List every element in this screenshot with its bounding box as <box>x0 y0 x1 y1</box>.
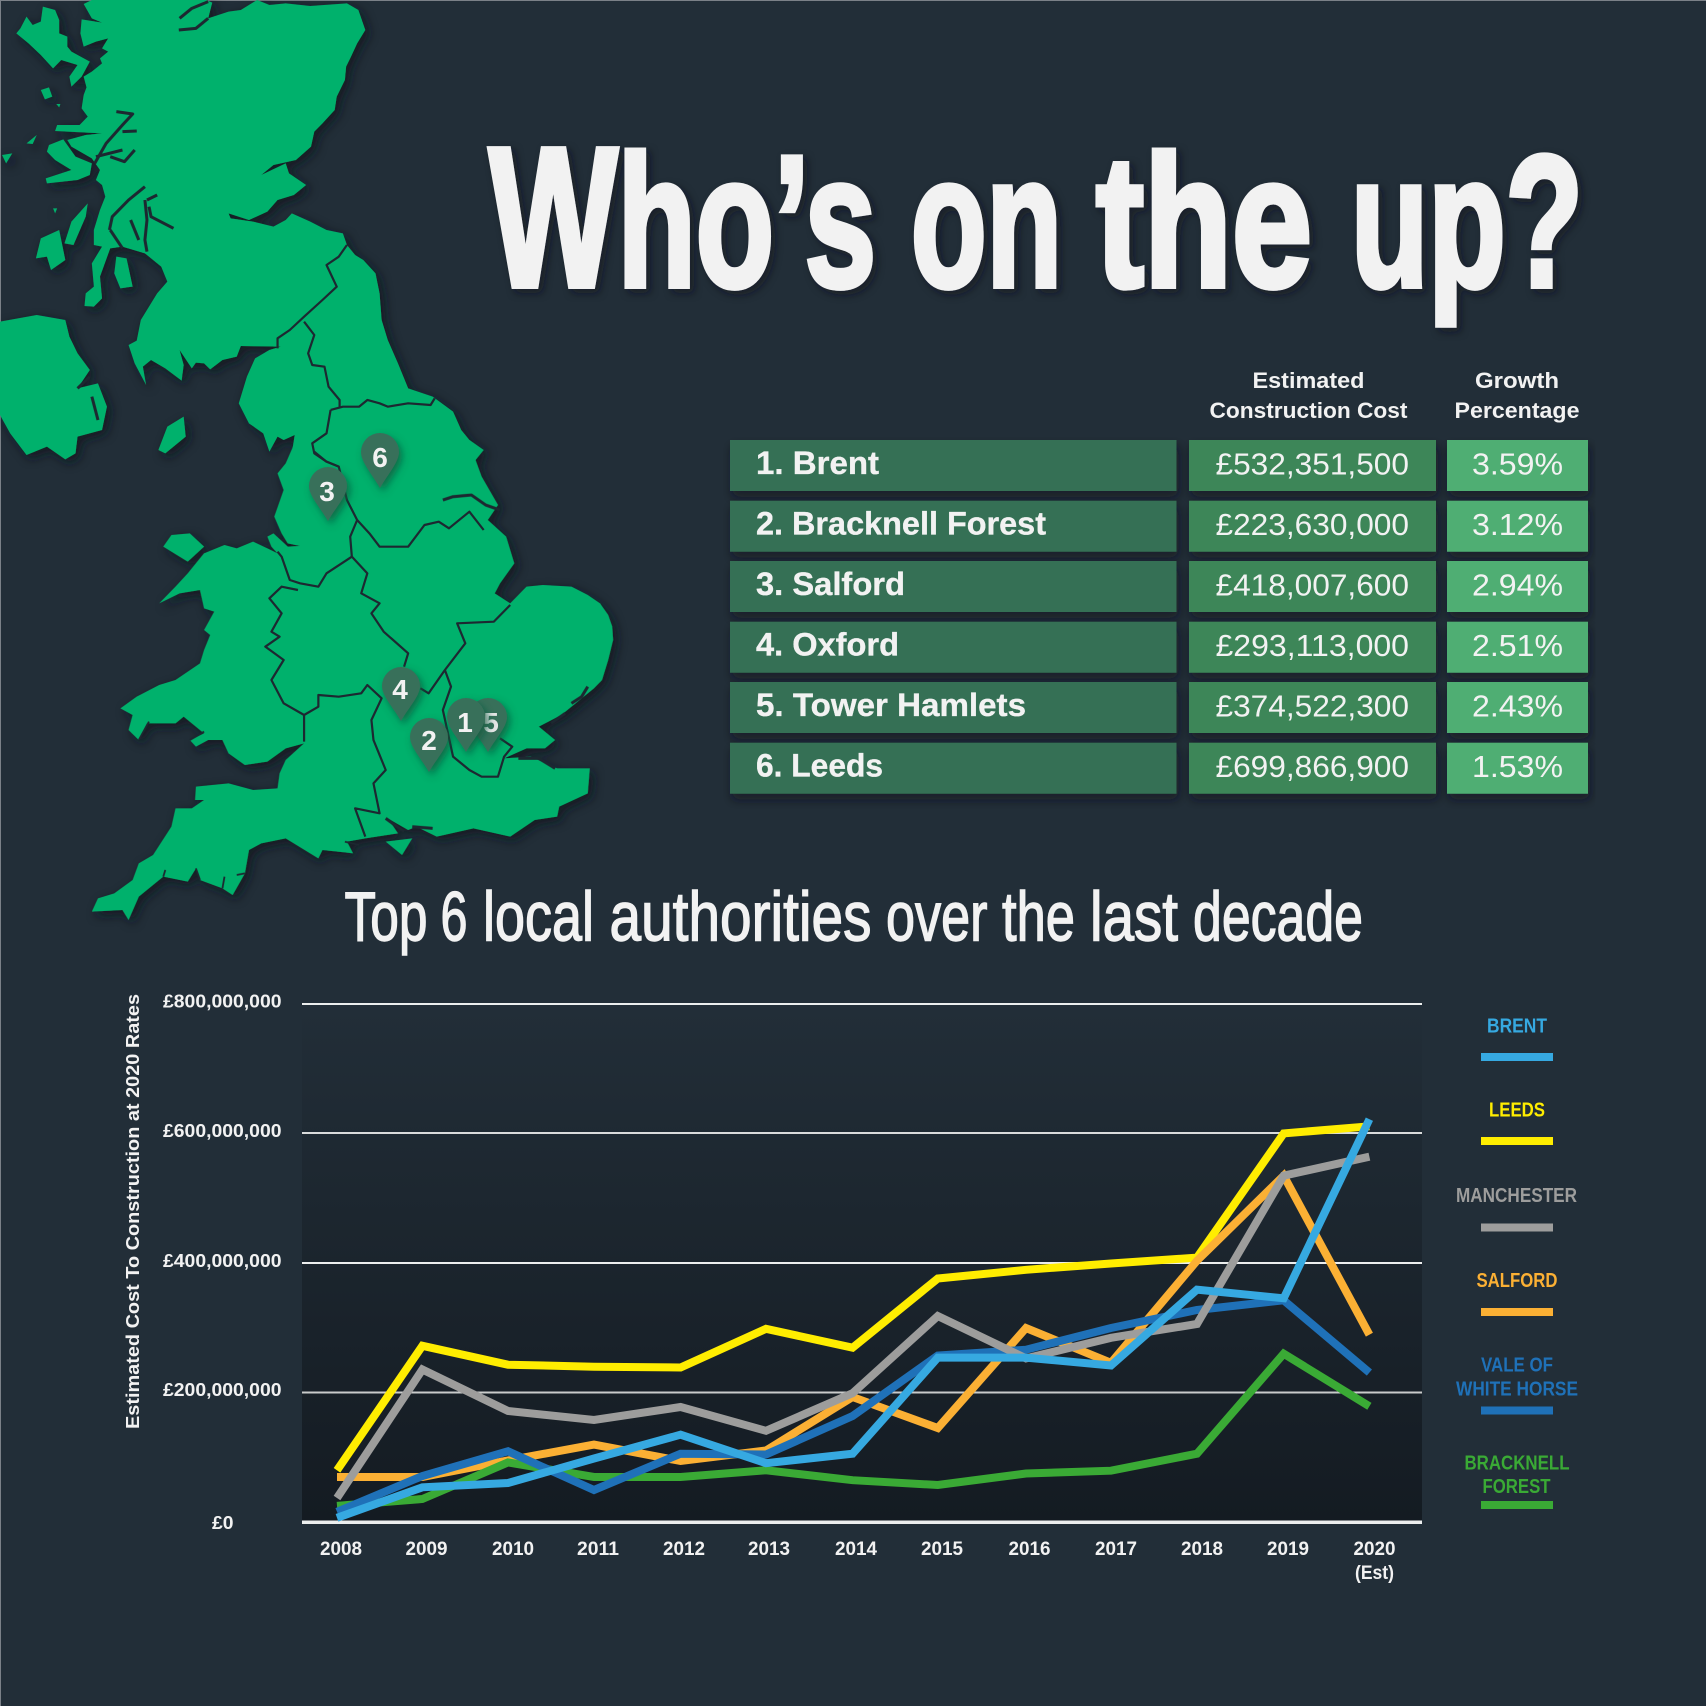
x-axis labels <box>320 1539 1396 1584</box>
series: Leeds <box>337 1126 1369 1470</box>
title: the <box>1096 117 1312 326</box>
Islay <box>36 230 65 270</box>
legend: Bracknell Forest: BRACKNELL <box>1464 1452 1570 1474</box>
chart heading: local <box>483 878 594 956</box>
row 3 Salford: 2.94% <box>1472 568 1563 602</box>
column headings: Construction Cost <box>1210 398 1408 423</box>
Isle of Wight <box>386 838 412 855</box>
row 3 Salford: 3. Salford <box>756 566 905 602</box>
map pin 6 <box>361 433 399 488</box>
Skye <box>16 7 90 87</box>
row 1 Brent: 3.59% <box>1472 446 1563 482</box>
x-axis labels: 2020 <box>1354 1539 1396 1560</box>
row 2 Bracknell Forest: 3.12% <box>1472 507 1563 542</box>
plot background <box>302 1004 1422 1522</box>
row 3 Salford <box>730 561 1588 612</box>
legend: Brent <box>1481 1016 1553 1061</box>
row 1 Brent: 1. Brent <box>756 445 879 481</box>
row 5 Tower Hamlets: 2.43% <box>1472 688 1563 724</box>
row 6 Leeds: 1.53% <box>1472 749 1563 784</box>
y-axis labels: £600,000,000 <box>163 1121 282 1141</box>
south-west coast creeks <box>139 722 359 888</box>
legend: Bracknell Forest: FOREST <box>1482 1476 1550 1498</box>
column headings: Estimated <box>1252 368 1364 393</box>
chart heading: the <box>1002 878 1075 956</box>
title: on <box>911 117 1062 326</box>
title: up? <box>1351 117 1583 326</box>
legend: Vale of White Horse <box>1456 1354 1578 1414</box>
legend: Leeds <box>1481 1100 1553 1145</box>
map pin 1 <box>447 698 485 752</box>
x-axis labels: 2010 <box>492 1539 534 1560</box>
x-axis labels: 2015 <box>921 1539 963 1560</box>
x-axis labels: 2008 <box>320 1539 362 1560</box>
x-axis labels: 2013 <box>748 1539 790 1560</box>
map pin 5: 5 <box>483 707 499 738</box>
row 6 Leeds: 6. Leeds <box>756 748 883 784</box>
y-axis labels: £200,000,000 <box>163 1380 282 1400</box>
x-axis labels: 2018 <box>1181 1539 1223 1560</box>
line chart <box>123 992 1422 1584</box>
map of the UK with region borders <box>0 0 613 920</box>
title: Who’s <box>489 107 876 329</box>
row 4 Oxford: 4. Oxford <box>756 626 899 662</box>
chart heading <box>344 878 1363 956</box>
series: Vale of White Horse <box>337 1300 1369 1512</box>
map pin 5 <box>469 698 507 752</box>
chart heading: Top <box>344 878 428 956</box>
row 4 Oxford <box>730 622 1588 673</box>
chart heading: last <box>1090 878 1178 956</box>
column headings <box>1210 368 1580 423</box>
y-axis labels: £0 <box>212 1513 234 1533</box>
legend: Bracknell Forest <box>1464 1452 1570 1509</box>
Anglesey <box>163 533 204 562</box>
row 5 Tower Hamlets: 5. Tower Hamlets <box>756 687 1026 723</box>
row 1 Brent <box>730 440 1588 491</box>
y-axis labels: £800,000,000 <box>163 992 282 1012</box>
legend: Manchester <box>1456 1185 1577 1232</box>
table: authorities ranked by growth <box>730 368 1588 794</box>
x-axis labels: 2012 <box>663 1539 705 1560</box>
map pin 4: 4 <box>392 674 408 705</box>
x-axis labels: (Est) <box>1355 1563 1394 1584</box>
legend: Salford <box>1476 1270 1558 1316</box>
row 4 Oxford: 2.51% <box>1472 628 1563 663</box>
x-axis labels: 2017 <box>1095 1539 1137 1560</box>
x-axis labels: 2016 <box>1008 1539 1050 1560</box>
chart legend <box>1456 1016 1578 1509</box>
Arran <box>114 257 133 288</box>
column headings: Growth <box>1475 368 1559 393</box>
row 2 Bracknell Forest <box>730 501 1588 552</box>
row 4 Oxford: £293,113,000 <box>1216 628 1409 663</box>
series: Brent <box>337 1119 1369 1518</box>
legend: Vale of White Horse: WHITE HORSE <box>1456 1378 1578 1400</box>
Northern Ireland <box>0 315 107 459</box>
row 2 Bracknell Forest: £223,630,000 <box>1216 507 1409 542</box>
row 6 Leeds: £699,866,900 <box>1216 749 1409 784</box>
chart heading: authorities <box>610 878 872 956</box>
row 5 Tower Hamlets <box>730 682 1588 733</box>
row 2 Bracknell Forest: 2. Bracknell Forest <box>756 506 1046 542</box>
x-axis labels: 2019 <box>1267 1539 1309 1560</box>
y-axis labels <box>163 992 282 1533</box>
Isle of Man <box>158 417 186 453</box>
series: Salford <box>337 1176 1369 1477</box>
series: Bracknell Forest <box>337 1354 1369 1506</box>
row 1 Brent: £532,351,500 <box>1216 446 1409 482</box>
legend: Leeds: LEEDS <box>1489 1100 1545 1122</box>
x-axis labels: 2009 <box>406 1539 448 1560</box>
England and Wales <box>92 440 613 920</box>
legend: Salford: SALFORD <box>1476 1270 1558 1292</box>
land masses <box>0 0 613 920</box>
row 6 Leeds <box>730 743 1588 794</box>
map pin 2 <box>410 718 448 772</box>
region borders <box>265 245 512 837</box>
small western isles <box>2 87 60 213</box>
y-axis labels: £400,000,000 <box>163 1251 282 1271</box>
map pin 1: 1 <box>457 707 473 738</box>
x-axis labels: 2011 <box>577 1539 619 1560</box>
map pin 3 <box>309 467 347 521</box>
legend: Brent: BRENT <box>1487 1016 1547 1038</box>
chart heading: over <box>886 878 988 956</box>
legend: Vale of White Horse: VALE OF <box>1481 1354 1553 1376</box>
sea lochs and estuaries <box>78 2 588 888</box>
x-axis labels: 2014 <box>835 1539 877 1560</box>
Mull <box>46 139 92 183</box>
title <box>489 107 1583 329</box>
map pin 6: 6 <box>372 442 388 473</box>
series: Manchester <box>337 1157 1369 1498</box>
map pin 3: 3 <box>319 476 335 507</box>
map pin 2: 2 <box>421 725 437 756</box>
chart heading: decade <box>1193 878 1363 956</box>
Jura <box>64 203 88 245</box>
legend: Manchester: MANCHESTER <box>1456 1185 1577 1207</box>
row 3 Salford: £418,007,600 <box>1216 568 1409 602</box>
chart heading: 6 <box>440 878 468 956</box>
row 5 Tower Hamlets: £374,522,300 <box>1216 688 1409 724</box>
Scotland and northern England <box>55 0 482 465</box>
y-axis title: Estimated Cost To Construction at 2020 Rates <box>123 994 143 1429</box>
column headings: Percentage <box>1454 398 1580 423</box>
map pin 4 <box>382 667 420 721</box>
